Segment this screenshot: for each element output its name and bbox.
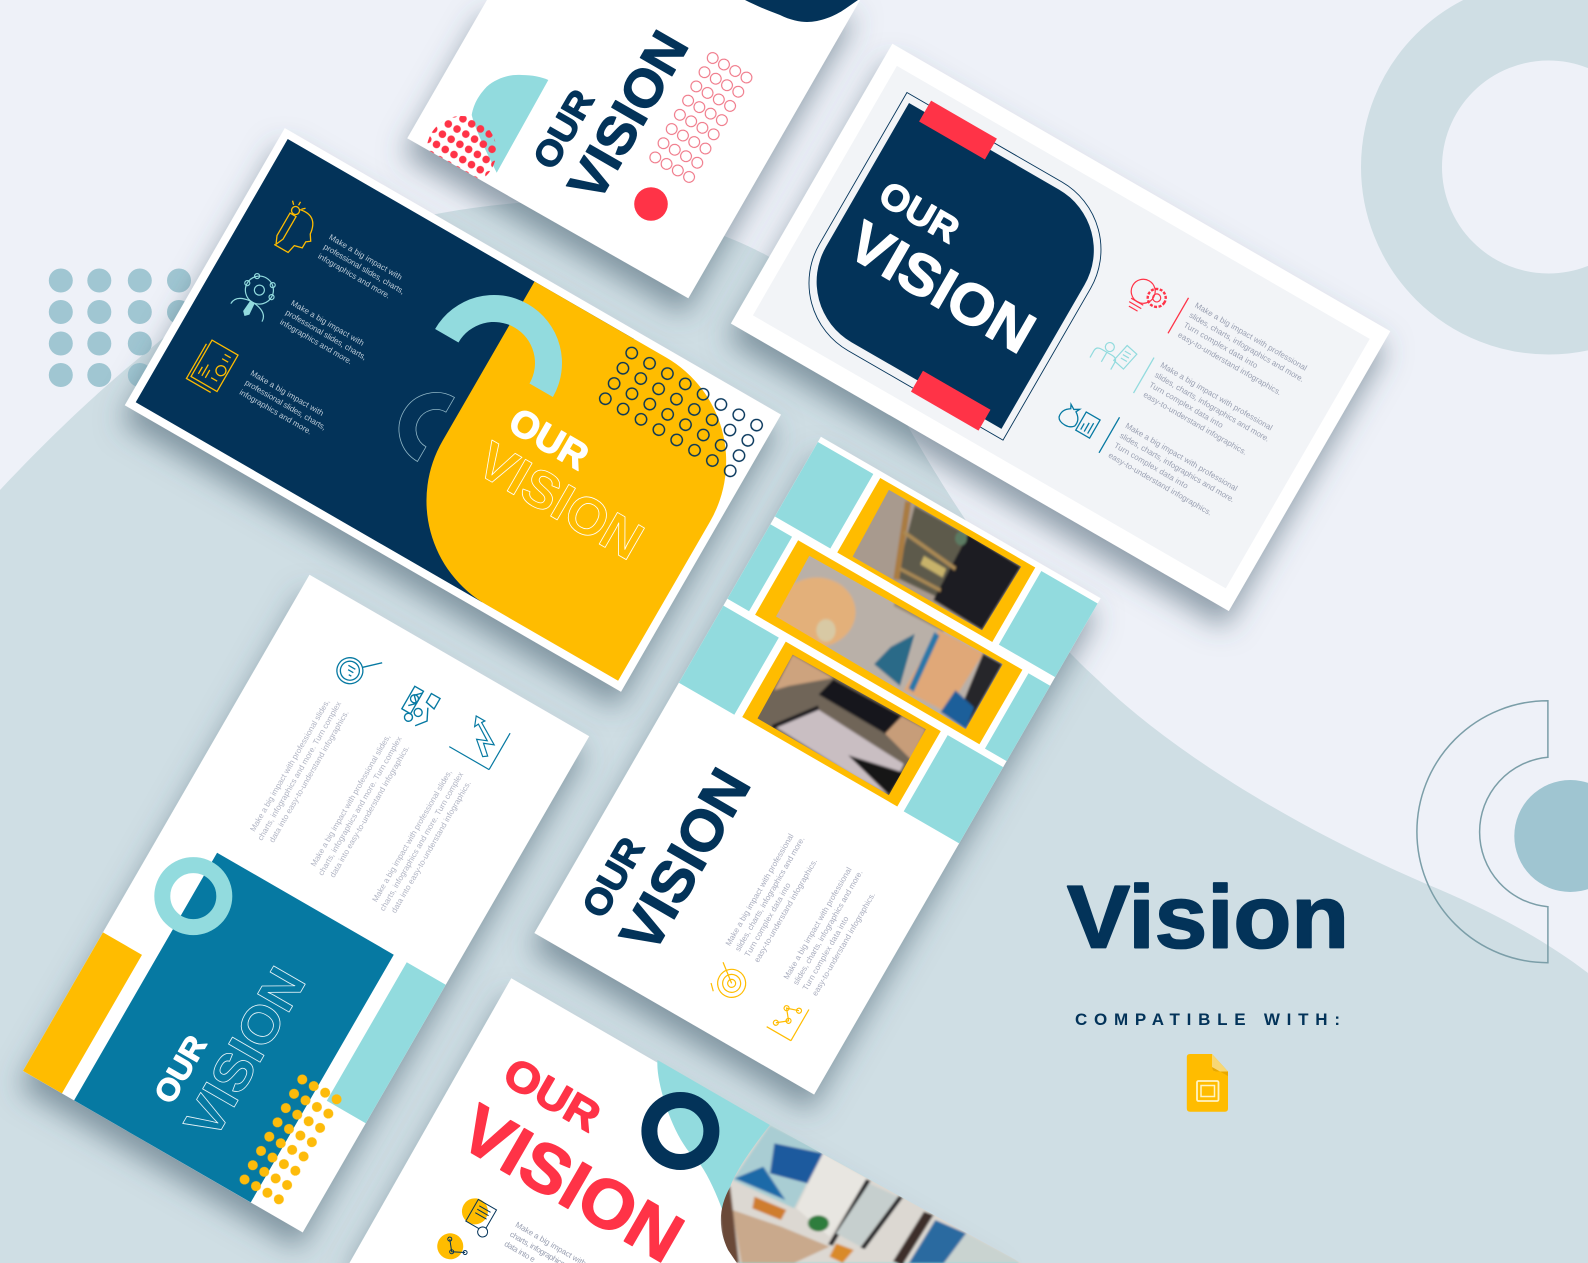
decorative dot grid: [49, 268, 191, 387]
decorative top-right ring: [1402, 20, 1588, 314]
text block 2: easy-to-understand infographics.: [1142, 390, 1248, 457]
text block 3: [238, 369, 333, 441]
navy blob at top: [745, 0, 858, 22]
text block 3: Make a big impact with professional: [1124, 421, 1239, 493]
icon: bulb and gear: [1123, 275, 1170, 321]
text block 2: Turn complex data into: [1147, 380, 1225, 430]
photo 3: [752, 651, 930, 799]
icon: report document: [186, 339, 238, 395]
slide: bottom red heading: [350, 978, 1024, 1263]
divider teal: [1134, 358, 1154, 393]
slide: blue panel: [23, 575, 589, 1232]
text block 1: easy-to-understand infographics.: [752, 857, 819, 964]
red circle: [634, 187, 668, 221]
text block 3: easy-to-understand infographics.: [1107, 451, 1213, 517]
icon: money bag and document: [1057, 401, 1100, 439]
text block 3: charts, infographics and more. Turn complex: [378, 770, 465, 913]
text block 1: Turn complex data into: [1182, 320, 1260, 370]
teal blocks: [679, 442, 1098, 844]
grey inner panel: [753, 66, 1370, 588]
heading: vision outline: VISION: [173, 957, 317, 1148]
slide: navy and yellow: [125, 128, 781, 692]
text block 1: Make a big impact with professional slides,: [248, 698, 332, 833]
blue block: [74, 853, 394, 1202]
navy panel: [136, 139, 634, 602]
text block 2: infographics and more.: [278, 317, 354, 366]
compatible with label: COMPATIBLE WITH:: [1075, 1010, 1340, 1029]
heading: vision outline: VISION: [467, 431, 653, 572]
text block 2: easy-to-understand infographics.: [810, 891, 877, 998]
text block 2: Make a big impact with: [289, 298, 366, 348]
icon: network graph: [767, 996, 809, 1041]
text block 2: [1142, 361, 1277, 463]
icon: yellow circle with graph: [432, 1229, 472, 1263]
text block 2: slides, charts, infographics and more.: [791, 869, 865, 987]
teal half shape: [472, 75, 548, 173]
icon: people: [398, 685, 440, 730]
text block 1: [316, 233, 412, 305]
text block 1: [724, 830, 826, 964]
text block 3: Make a big impact with: [249, 369, 325, 418]
icon: growth chart: [449, 710, 510, 770]
text block 3: data into easy-to-understand infographics.: [389, 779, 473, 915]
heading: our vision: OUR: [525, 82, 602, 176]
heading: our vision: [522, 1, 700, 210]
yellow dot grid: [235, 1069, 346, 1210]
text block 2: Make a big impact with professional: [782, 865, 854, 981]
icon: google slides: [1187, 1054, 1228, 1112]
navy rounded panel: [791, 103, 1119, 429]
yellow block: [23, 932, 142, 1093]
text block 1: professional slides, charts,: [322, 242, 406, 296]
photo 2: [770, 551, 1007, 734]
text block 3: slides, charts, infographics and more.: [1118, 431, 1236, 504]
text block 1: charts, infographics and more. Turn complex: [256, 700, 343, 842]
icon: head with pencil: [269, 198, 325, 259]
text block 2: [278, 298, 374, 371]
heading: our vision: OUR: [872, 173, 966, 251]
text block 1: [1176, 301, 1311, 404]
navy ring: [649, 1100, 711, 1162]
teal ring: [162, 865, 224, 927]
heading: our vision: [448, 1045, 722, 1263]
slide: top right navy panel: [731, 44, 1390, 611]
decorative outlined half ring: [1417, 701, 1548, 963]
pink ring grid: [646, 48, 756, 187]
text block 2: Turn complex data into: [801, 914, 851, 992]
text block 2: Make a big impact with professional slides,: [309, 733, 392, 868]
red dot half circle: [427, 116, 496, 179]
heading: our vision: VISION: [608, 758, 763, 963]
icon: yellow circle with document: [454, 1194, 500, 1239]
photos: [752, 486, 1026, 799]
icon: person and document: [1090, 332, 1138, 377]
teal half ring: [435, 270, 587, 397]
decorative right circle: [1514, 780, 1588, 892]
slide: top center our vision: [406, 0, 860, 298]
teal block: [327, 962, 446, 1123]
text block 2: data into easy-to-understand infographics.: [328, 744, 411, 879]
text block 2: slides, charts, infographics and more.: [1153, 370, 1271, 444]
text block 2: charts, infographics and more. Turn complex: [316, 735, 404, 877]
heading: our vision: VISION: [557, 22, 700, 210]
text block 1: Make a big impact with: [327, 233, 404, 282]
heading: our vision: VISION: [837, 209, 1046, 366]
heading: our vision: OUR: [495, 1049, 608, 1142]
heading: our vision: OUR: [574, 830, 652, 925]
icon: target stopwatch: [708, 962, 751, 1004]
text block 3: [1107, 421, 1242, 524]
text block 1: Make a big impact with professional: [1193, 301, 1309, 373]
divider blue: [1099, 417, 1120, 453]
text block 3: infographics and more.: [238, 388, 313, 436]
text block 1: easy-to-understand infographics.: [1176, 330, 1283, 397]
divider red: [1168, 298, 1189, 333]
text block 3: professional slides, charts,: [243, 378, 328, 432]
text block 1: Make a big impact with professional: [724, 832, 796, 948]
text block 1: Turn complex data into: [743, 881, 793, 959]
heading: our: OUR: [501, 400, 595, 479]
icon: magnifier: [332, 644, 382, 694]
yellow blob: [383, 282, 770, 681]
title: Vision: [1067, 867, 1349, 967]
red tab bottom: [911, 371, 990, 431]
teal blob: [657, 1060, 1019, 1263]
icon: people network: [229, 269, 282, 324]
text block 1: data into easy-to-understand infographics.: [267, 709, 351, 844]
text block 2: professional slides, charts,: [284, 308, 368, 362]
ring dot grid: [592, 340, 770, 484]
photo 1: [848, 486, 1026, 634]
yellow photo frames: [708, 458, 1070, 826]
text block 1: infographics and more.: [316, 252, 392, 300]
text block 2: [782, 863, 884, 998]
text block 1: slides, charts, infographics and more.: [1188, 311, 1306, 384]
slide: photo collage: [534, 437, 1101, 1094]
photo: meeting room: [715, 1123, 1024, 1263]
text block 1: slides, charts, infographics and more.: [733, 835, 807, 953]
heading: our: OUR: [147, 1029, 214, 1109]
thin outlined half ring: [385, 379, 454, 462]
navy rounded panel outline: [780, 93, 1130, 440]
text block 3: Make a big impact with professional slides,: [370, 768, 454, 904]
red tab top: [919, 101, 997, 159]
text block 3: Turn complex data into: [1112, 441, 1190, 491]
text block 2: Make a big impact with professional: [1159, 361, 1274, 432]
